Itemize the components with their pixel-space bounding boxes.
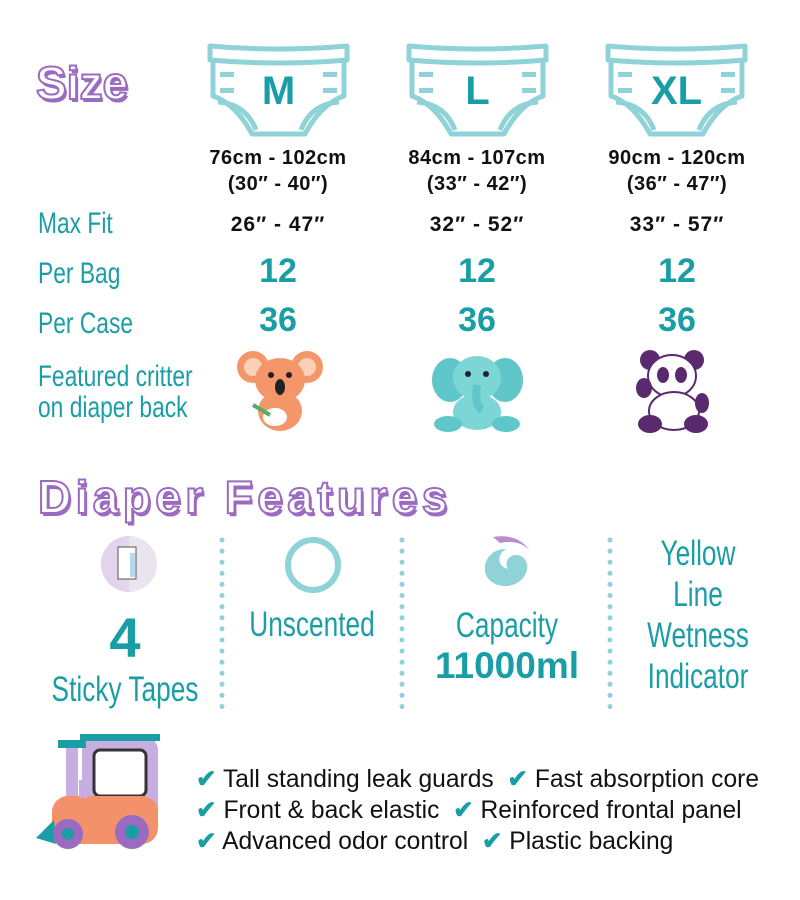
size ranges: 76cm - 102cm bbox=[209, 147, 347, 169]
per case values: 36 bbox=[259, 301, 297, 339]
per bag values: 12 bbox=[458, 252, 496, 290]
diaper icon M bbox=[208, 44, 350, 136]
icon: elephant bbox=[432, 356, 523, 432]
feature: sticky tapes: 4 bbox=[109, 606, 141, 669]
label: Featured critter: on diaper back bbox=[38, 391, 188, 424]
feature: unscented: Unscented bbox=[249, 605, 375, 644]
label: Per Bag: Per Bag bbox=[38, 257, 120, 290]
feature: capacity: 11000ml bbox=[435, 645, 579, 686]
icon: swirl bbox=[484, 536, 530, 586]
title: Diaper Features: Diaper Features bbox=[38, 471, 452, 523]
divider dots bbox=[220, 538, 612, 710]
checklist: ✔ Front & back elastic ✔ Reinforced frontal panel bbox=[196, 797, 742, 824]
size ranges: (36″ - 47″) bbox=[627, 173, 727, 195]
diaper icon L: L bbox=[465, 69, 490, 113]
icon: tape bbox=[101, 536, 157, 592]
size ranges: 90cm - 120cm bbox=[608, 147, 746, 169]
label: Max Fit: Max Fit bbox=[38, 207, 113, 240]
icon: ring bbox=[285, 537, 341, 593]
size ranges bbox=[209, 147, 746, 195]
feature: capacity bbox=[435, 536, 579, 686]
icon: koala bbox=[237, 351, 323, 431]
label: Per Case: Per Case bbox=[38, 307, 133, 340]
max fit values: 33″ - 57″ bbox=[630, 213, 724, 236]
per case values: 36 bbox=[658, 301, 696, 339]
checklist: ✔ Advanced odor control ✔ Plastic backing bbox=[196, 828, 673, 855]
feature: wetness indicator: Line bbox=[673, 575, 723, 614]
per case values: 36 bbox=[458, 301, 496, 339]
per case values bbox=[259, 301, 696, 339]
diaper icon XL: XL bbox=[651, 69, 702, 113]
per bag values: 12 bbox=[658, 252, 696, 290]
feature: wetness indicator: Yellow bbox=[661, 534, 735, 573]
size ranges: (30″ - 40″) bbox=[228, 173, 328, 195]
label: Featured critter: Featured critter bbox=[38, 360, 193, 393]
feature: wetness indicator: Indicator bbox=[648, 657, 748, 696]
title: Size: Size bbox=[36, 57, 128, 109]
size ranges: (33″ - 42″) bbox=[427, 173, 527, 195]
feature: sticky tapes bbox=[52, 536, 198, 709]
label: Featured critter bbox=[38, 360, 193, 424]
checklist: ✔ Tall standing leak guards ✔ Fast absorption core bbox=[196, 766, 759, 793]
icon: panda bbox=[636, 350, 709, 433]
size ranges: 84cm - 107cm bbox=[408, 147, 546, 169]
feature: capacity: Capacity bbox=[456, 606, 558, 645]
diaper icon M: M bbox=[262, 69, 295, 113]
max fit values bbox=[231, 213, 724, 236]
diaper icon L bbox=[406, 44, 548, 136]
icon: train bbox=[36, 734, 160, 849]
diaper icon XL bbox=[606, 44, 748, 136]
max fit values: 26″ - 47″ bbox=[231, 213, 325, 236]
feature: unscented bbox=[249, 537, 375, 644]
checklist bbox=[196, 766, 759, 855]
feature: sticky tapes: Sticky Tapes bbox=[52, 670, 198, 709]
feature: wetness indicator bbox=[647, 534, 749, 696]
max fit values: 32″ - 52″ bbox=[430, 213, 524, 236]
feature: wetness indicator: Wetness bbox=[647, 616, 749, 655]
per bag values bbox=[259, 252, 696, 290]
per bag values: 12 bbox=[259, 252, 297, 290]
